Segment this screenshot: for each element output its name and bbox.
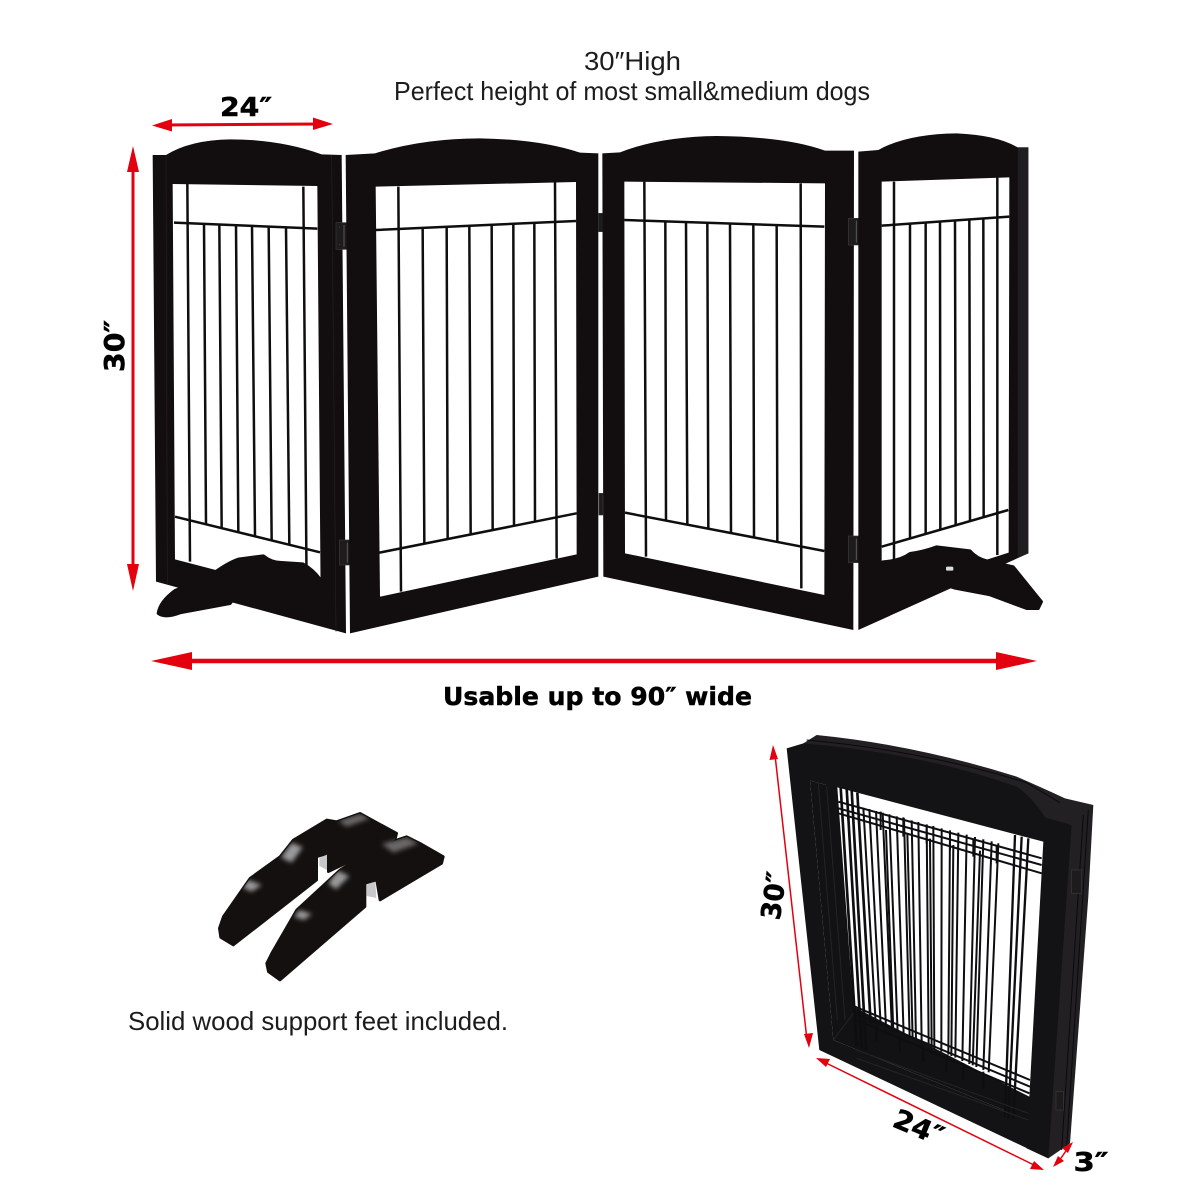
label: folded height: 30″ [756, 870, 793, 922]
opening [810, 781, 1043, 1120]
arrow: folded depth [1053, 1142, 1073, 1167]
heading: gate height note: 30″High [584, 46, 681, 76]
arrow: panel width 24 inch [152, 118, 333, 132]
panel 4 [858, 133, 1042, 630]
heading: gate height note: Perfect height of most small&medium dogs [394, 76, 870, 106]
white window [837, 787, 1043, 1097]
caption: support feet: Solid wood support feet included. [128, 1006, 508, 1036]
panel 3 [602, 136, 865, 630]
front frame [787, 743, 1072, 1158]
heading: gate height note [394, 46, 870, 106]
folded gate [787, 735, 1093, 1158]
back layers [803, 735, 1093, 1158]
panel 1 [153, 139, 355, 633]
panel 2 [346, 138, 603, 633]
label: gate height 30 inch: 30″ [98, 320, 131, 372]
label: folded width: 24″ [888, 1104, 948, 1153]
arrow: folded width [816, 1058, 1044, 1170]
icon: support feet [219, 813, 443, 980]
arrow: total usable width [151, 652, 1037, 670]
arrow: gate height 30 inch [127, 146, 139, 591]
label: usable width: Usable up to 90″ wide [443, 682, 752, 711]
arrow: folded height [770, 745, 813, 1048]
label: folded depth: 3″ [1074, 1148, 1108, 1178]
label: panel width 24 inch: 24″ [220, 93, 272, 123]
gate: four panel folding gate [153, 133, 1042, 633]
